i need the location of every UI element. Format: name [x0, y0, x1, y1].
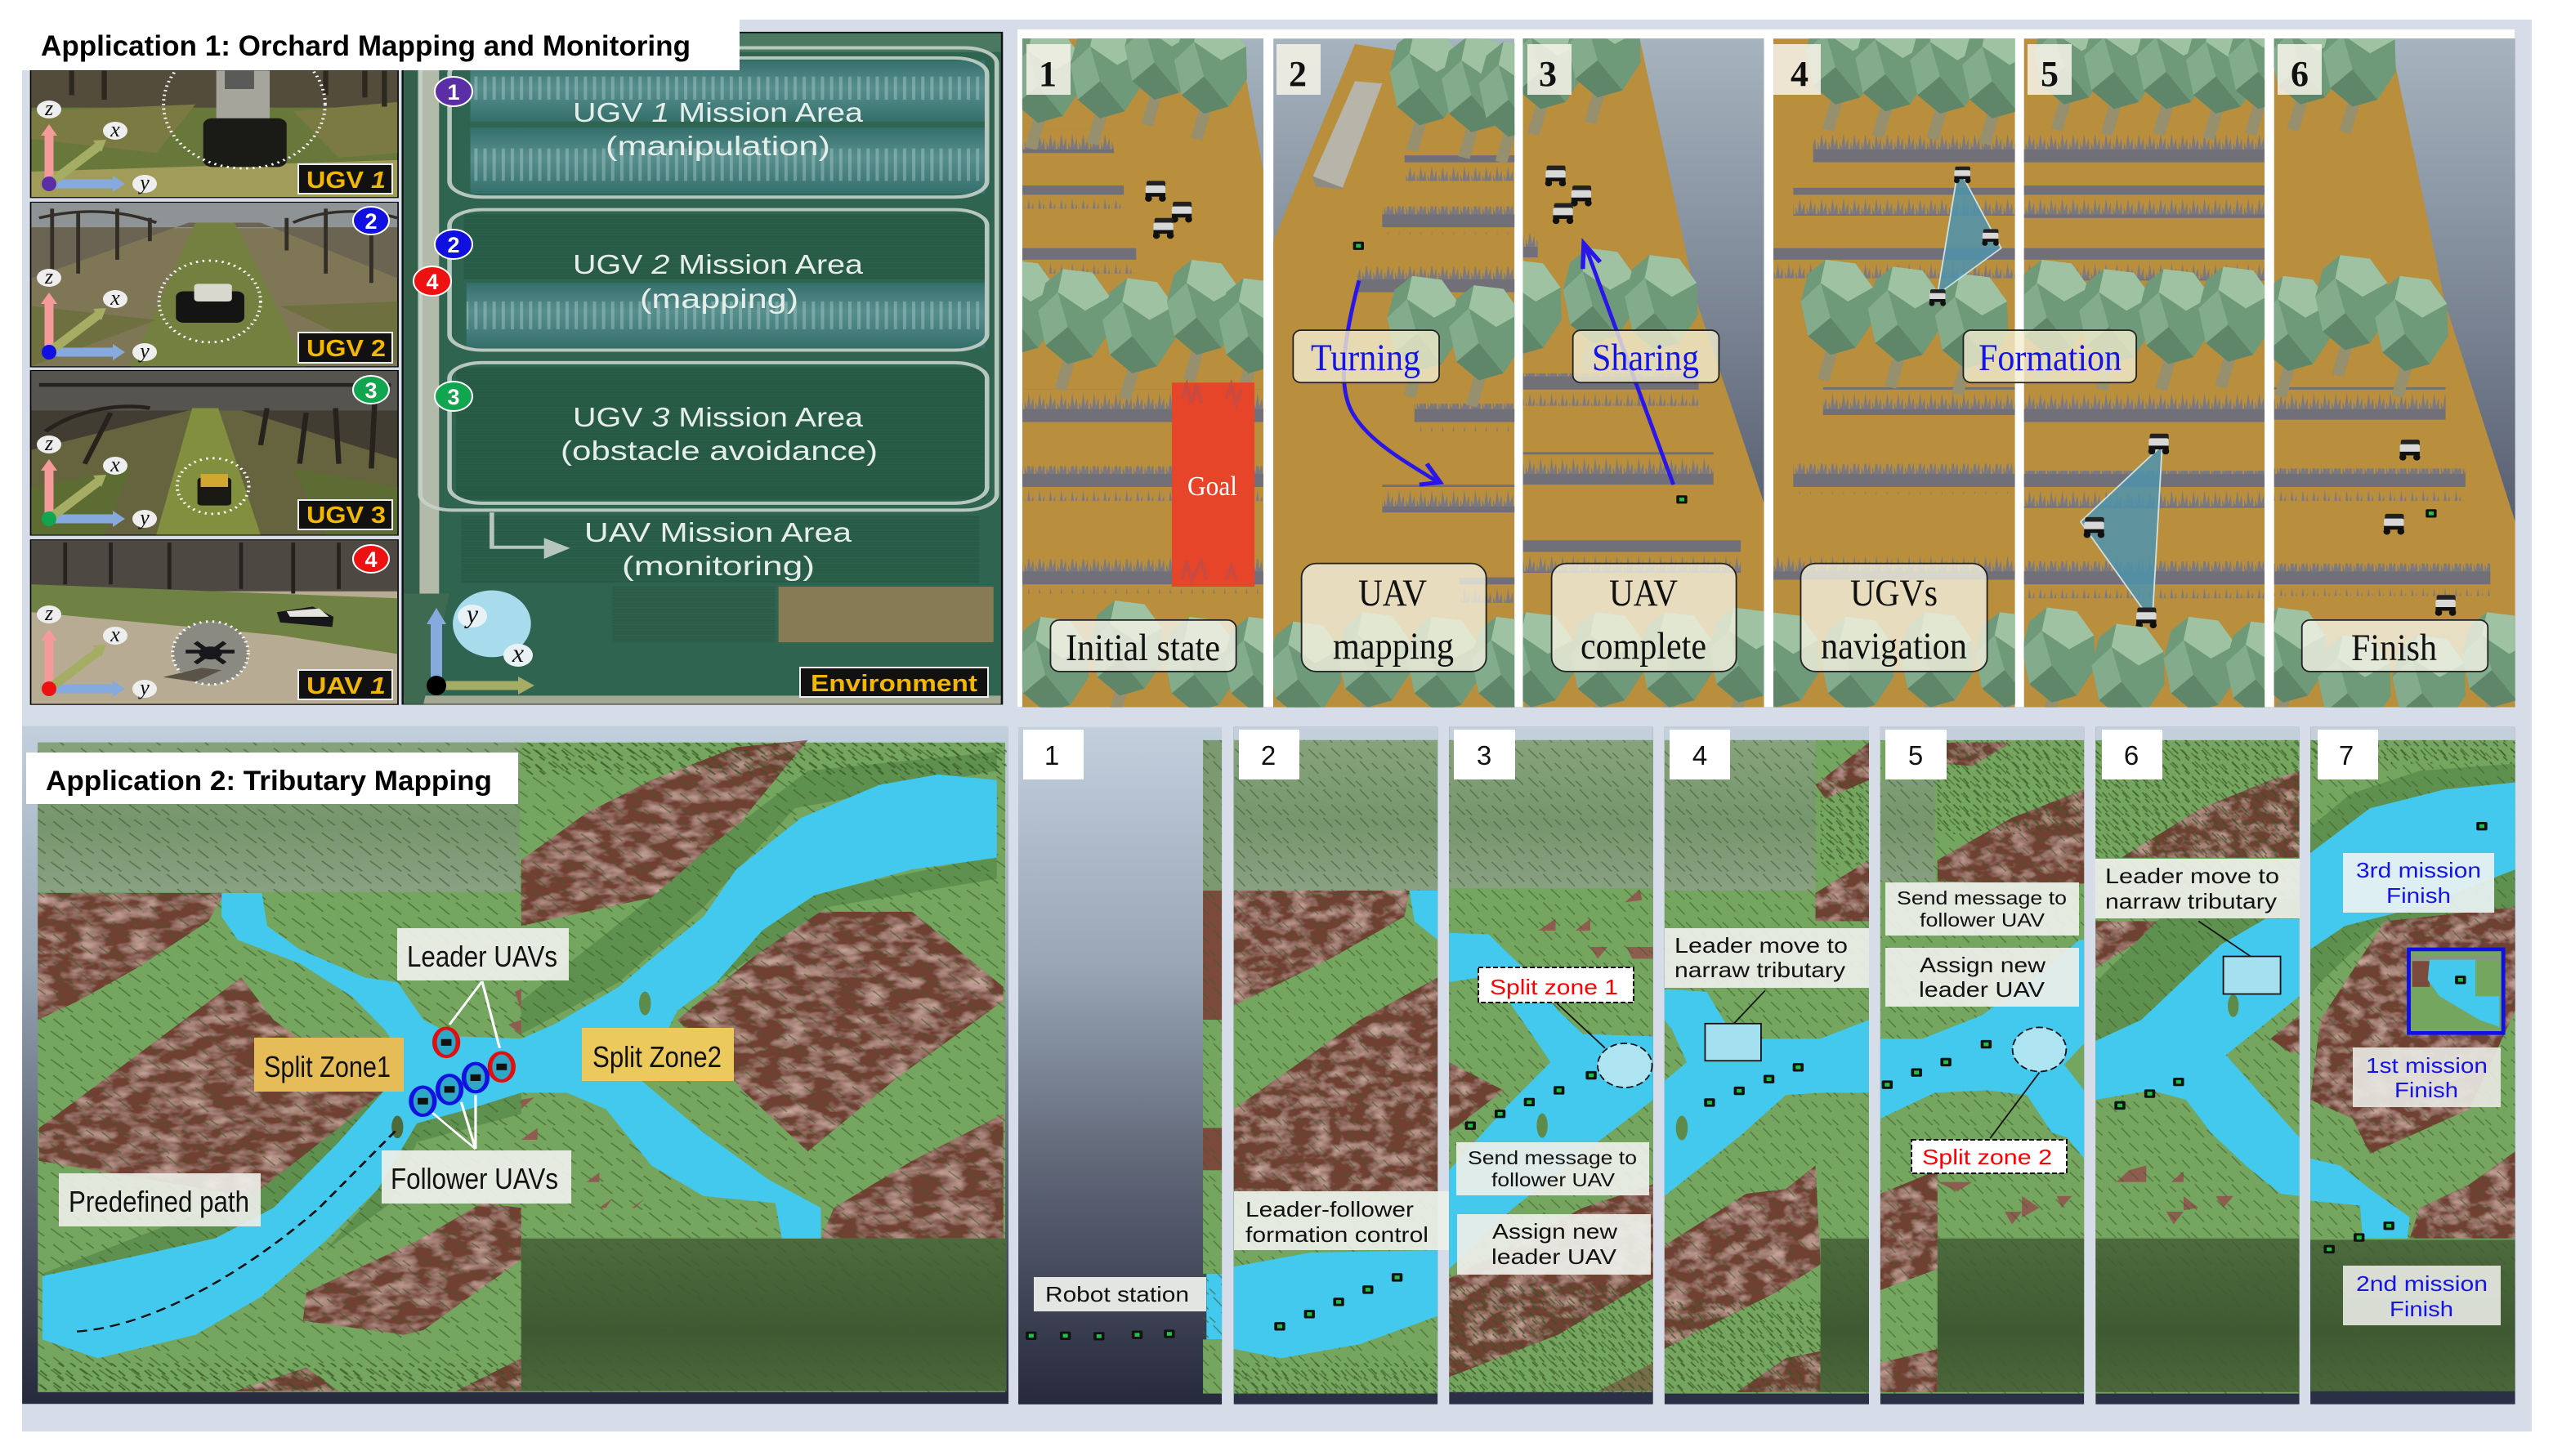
- UGV 3 coordinate axes: y: [137, 506, 150, 529]
- label: Split Zone1: Split Zone1: [264, 1050, 391, 1083]
- label: UGV 1 mission area: UGV 1 Mission Area: [573, 97, 864, 127]
- step 5: split zone 2: [1880, 727, 2084, 1405]
- formation label: Formation: [1978, 337, 2122, 379]
- label: 3rd mission: 3rd mission: [2356, 858, 2481, 882]
- label: assign new leader: Assign new: [1492, 1219, 1617, 1244]
- frame caption: navigation: [1821, 625, 1967, 668]
- label: Predefined path: [59, 1173, 261, 1226]
- label: UGV 1 mission area: [573, 97, 864, 161]
- label: Leader UAVs: [397, 928, 569, 980]
- label: UAV mission area: (monitoring): [622, 551, 815, 581]
- panel: tributary overview map: [22, 726, 1008, 1404]
- label: 1st mission: 1st mission: [2366, 1053, 2488, 1078]
- UGV 2 badge: [353, 207, 389, 234]
- label: leader move: Leader move to: [2105, 864, 2279, 888]
- label: leader move: [1665, 928, 1869, 988]
- UGV 1 coordinate axes: x: [110, 118, 120, 141]
- label: Follower UAVs: Follower UAVs: [391, 1162, 558, 1195]
- frame caption: [1581, 572, 1706, 668]
- UGV 2 coordinate axes: [37, 265, 157, 363]
- label: UGV 2 mission area: [573, 249, 864, 314]
- UGV 1 coordinate axes: [37, 96, 157, 194]
- label: UGV 2 mission area: (mapping): [640, 284, 798, 314]
- label: leader move: [2095, 859, 2300, 918]
- label: assign new leader: leader UAV: [1491, 1244, 1617, 1269]
- label: leader-follower: formation control: [1245, 1222, 1429, 1247]
- frame numbers: 1: [1039, 54, 1057, 94]
- UGV 3 coordinate axes: z: [44, 431, 53, 455]
- frame caption: UAV: [1358, 572, 1427, 614]
- badges on map: 2: [447, 233, 460, 257]
- label: leader move: narraw tributary: [2105, 889, 2277, 913]
- step 6: narrow tributary again: [2095, 727, 2300, 1405]
- Sharing label: Sharing: [1592, 337, 1699, 379]
- label: UGV 2 mission area: UGV 2 Mission Area: [573, 249, 864, 279]
- label: send message: Send message to: [1897, 887, 2067, 909]
- UGV 3 coordinate axes: x: [110, 453, 120, 476]
- UGV 3 badge: 3: [364, 378, 378, 403]
- inset: blue highlighted zoom box: [2409, 949, 2503, 1033]
- frame numbers: 4: [1791, 54, 1809, 94]
- step 2: leader-follower formation: [1234, 727, 1457, 1405]
- label: send message: [1885, 882, 2079, 936]
- label: Split Zone1: [254, 1038, 404, 1092]
- Turning label: Turning: [1311, 337, 1420, 379]
- label: leader-follower: [1234, 1191, 1457, 1250]
- panel: orchard simulation sequence: [1017, 29, 2515, 708]
- frame numbers: 5: [2041, 54, 2059, 94]
- step 1: robot station: [1018, 727, 1222, 1405]
- photo: UGV 2: [30, 202, 399, 368]
- title: application 2: Application 2: Tributary Mapping: [46, 766, 492, 797]
- UAV 1 coordinate axes: z: [44, 601, 53, 625]
- UGV 3 tag: [298, 500, 392, 529]
- label: UGV 1 mission area: (manipulation): [606, 131, 830, 161]
- label: send message: Send message to: [1468, 1147, 1637, 1168]
- mission area outlines and arrow: [420, 47, 997, 559]
- frame 6: finish: [2274, 38, 2515, 708]
- frame 4: UGVs navigation: [1773, 38, 2015, 708]
- label: assign new leader: leader UAV: [1919, 977, 2046, 1002]
- step numbers: [1023, 730, 2378, 779]
- label: send message: follower UAV: [1491, 1169, 1616, 1190]
- frame numbers: 6: [2291, 54, 2309, 94]
- label: robot station: Robot station: [1045, 1282, 1189, 1306]
- environment tag: [800, 668, 988, 697]
- frame numbers: 3: [1539, 54, 1557, 94]
- frame caption: Initial state: [1066, 627, 1220, 669]
- label: split zone 1: [1478, 967, 1634, 1003]
- UAV 1 coordinate axes: x: [110, 623, 120, 646]
- step numbers: 3: [1477, 740, 1491, 770]
- label: 3rd mission: Finish: [2386, 883, 2451, 908]
- UGV 3 coordinate axes: [37, 431, 157, 529]
- frame caption: mapping: [1333, 625, 1454, 668]
- UGV 2 tag: UGV 2: [306, 336, 386, 362]
- label: send message: follower UAV: [1920, 909, 2046, 931]
- step 7: missions finish: [2310, 727, 2515, 1405]
- environment tag: Environment: [811, 671, 977, 697]
- UGV 2 badge: 2: [364, 209, 378, 234]
- arrows from labels to UAVs: [432, 981, 499, 1149]
- badges on map: 4: [426, 270, 439, 294]
- panel: application 1 photos and environment: [30, 33, 1002, 705]
- label: UAV mission area: UAV Mission Area: [584, 517, 852, 547]
- label: 1st mission: [2353, 1047, 2501, 1107]
- UAV 1 coordinate axes: y: [137, 676, 150, 699]
- label: split zone 2: [1911, 1140, 2067, 1173]
- step numbers: 2: [1261, 740, 1276, 770]
- step 3: split zone 1: [1449, 727, 1653, 1405]
- frame caption: Finish: [2351, 627, 2437, 669]
- label: assign new leader: [1457, 1214, 1651, 1275]
- label: UAV mission area: [584, 517, 852, 581]
- step numbers: 4: [1692, 740, 1707, 770]
- frame 2: UAV mapping: [1273, 38, 1515, 708]
- label: assign new leader: [1885, 948, 2079, 1007]
- step numbers: 5: [1908, 740, 1923, 770]
- environment coordinate axes: y: [464, 599, 479, 628]
- UAV 1 badge: 4: [364, 547, 378, 572]
- frame caption: [1821, 572, 1967, 668]
- photo: UGV 3: [30, 370, 399, 536]
- goal label: Goal: [1187, 471, 1237, 502]
- panel: tributary step frames: [1018, 727, 2515, 1405]
- label: UGV 3 mission area: UGV 3 Mission Area: [573, 402, 864, 432]
- frame 1: initial state: [1022, 38, 1263, 708]
- label: leader-follower: Leader-follower: [1245, 1197, 1414, 1222]
- frame 3: UAV complete: [1522, 38, 1764, 708]
- frame caption: UGVs: [1850, 572, 1938, 614]
- environment coordinate axes: x: [512, 638, 524, 668]
- title: application 1: Application 1: Orchard Mapping and Monitoring: [41, 30, 691, 62]
- frame 5: formation: [2023, 38, 2265, 708]
- label: 2nd mission: Finish: [2390, 1297, 2453, 1321]
- follower UAV markers: [411, 1064, 487, 1115]
- frame numbers: [1026, 44, 2322, 95]
- UGV 2 coordinate axes: y: [137, 339, 150, 363]
- leader UAV markers: [435, 1029, 513, 1081]
- river: [42, 775, 997, 1358]
- label: robot station: [1034, 1277, 1206, 1311]
- step numbers: 1: [1044, 740, 1059, 770]
- label: assign new leader: Assign new: [1920, 953, 2046, 977]
- step numbers: 7: [2339, 740, 2354, 770]
- label: Leader UAVs: Leader UAVs: [407, 940, 557, 973]
- label: UGV 3 mission area: (obstacle avoidance): [561, 435, 878, 466]
- label: Predefined path: Predefined path: [69, 1185, 249, 1218]
- label: 2nd mission: [2343, 1266, 2501, 1325]
- UGV 2 coordinate axes: x: [110, 286, 120, 310]
- label: UGV 3 mission area: [561, 402, 878, 466]
- photo: UGV 1: [29, 70, 399, 198]
- UGV 1 coordinate axes: z: [44, 96, 53, 120]
- badges on map: 3: [447, 385, 460, 409]
- predefined path dashed arrow: [77, 1130, 396, 1332]
- UAV 1 tag: UAV 1: [306, 673, 386, 699]
- step 4: narrow tributary: [1665, 727, 1869, 1405]
- frame numbers: 2: [1289, 54, 1307, 94]
- UGV 3 badge: [353, 376, 389, 404]
- UAV 1 coordinate axes: [37, 601, 157, 699]
- title: application 1: [22, 20, 740, 70]
- UGV 1 coordinate axes: y: [137, 171, 150, 194]
- label: 1st mission: Finish: [2394, 1078, 2458, 1102]
- title: application 2: [26, 753, 518, 804]
- environment coordinate axes: [427, 599, 534, 695]
- badges on map: [414, 77, 472, 411]
- UAV 1 badge: [353, 545, 389, 573]
- panel: environment aerial map: [403, 33, 1002, 704]
- photo: UAV 1: [30, 539, 399, 705]
- step numbers: 6: [2124, 740, 2139, 770]
- label: leader move: Leader move to: [1674, 933, 1848, 958]
- label: split zone 1: Split zone 1: [1490, 975, 1618, 999]
- label: Split Zone2: Split Zone2: [592, 1040, 722, 1074]
- UGV 2 coordinate axes: z: [44, 265, 53, 288]
- label: split zone 2: Split zone 2: [1922, 1145, 2052, 1169]
- UGV 1 tag: UGV 1: [306, 167, 386, 194]
- label: 3rd mission: [2343, 853, 2494, 913]
- label: Follower UAVs: [382, 1150, 571, 1204]
- label: leader move: narraw tributary: [1674, 958, 1845, 982]
- frame caption: [1333, 572, 1454, 668]
- UGV 2 tag: [298, 333, 392, 363]
- frame caption: UAV: [1609, 572, 1678, 614]
- label: Split Zone2: [582, 1028, 734, 1081]
- badges on map: 1: [447, 80, 460, 105]
- label: send message: [1456, 1142, 1649, 1195]
- frame caption: complete: [1581, 625, 1706, 668]
- UGV 3 tag: UGV 3: [306, 502, 386, 529]
- label: 2nd mission: 2nd mission: [2356, 1271, 2488, 1296]
